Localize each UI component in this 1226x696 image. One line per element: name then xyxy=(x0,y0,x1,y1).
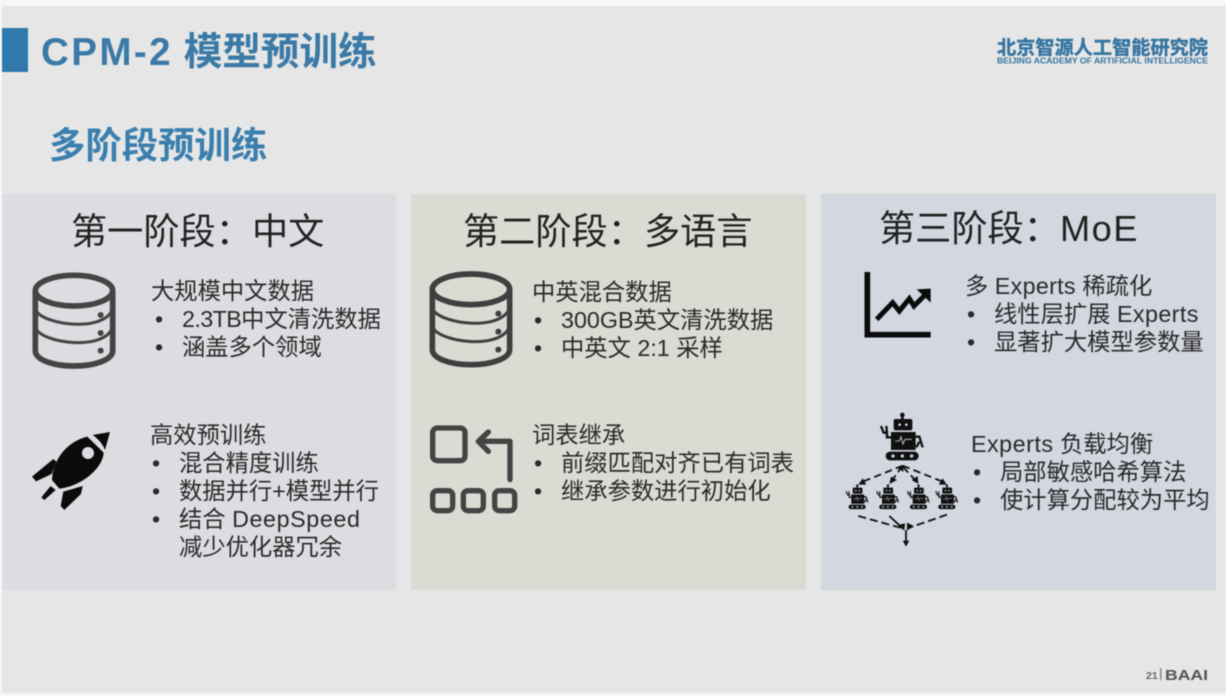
panel heading: stage two: 第二阶段：多语言 xyxy=(463,203,752,255)
icon: database xyxy=(428,270,514,368)
icon: database xyxy=(32,272,116,370)
text block: efficient pre-training: 结合 DeepSpeed xyxy=(179,506,361,532)
logo: Beijing Academy of Artificial Intelligence: BEIJING ACADEMY OF ARTIFICIAL INTELLIGENCE xyxy=(997,56,1209,66)
text block: large-scale Chinese data: 2.3TB中文清洗数据 xyxy=(182,306,381,332)
text block: large-scale Chinese data: 涵盖多个领域 xyxy=(182,334,322,360)
text block: efficient pre-training: 高效预训练 xyxy=(150,422,266,448)
text block: vocabulary inheritance: 词表继承 xyxy=(532,422,625,448)
text block: efficient pre-training: 混合精度训练 xyxy=(179,450,319,476)
panel: stage one, Chinese xyxy=(2,194,396,590)
panel heading: stage one: 第一阶段：中文 xyxy=(71,203,324,255)
icon: rising line chart xyxy=(864,271,932,338)
text block: multiple experts sparsification: 线性层扩展 Experts xyxy=(994,301,1199,327)
text block: experts load balancing: 使计算分配较为平均 xyxy=(1000,487,1210,513)
text block: experts load balancing: Experts 负载均衡 xyxy=(971,431,1153,457)
text block: mixed Chinese-English data xyxy=(532,279,773,361)
text block: mixed Chinese-English data: 中英混合数据 xyxy=(532,279,672,305)
panel heading: stage three: 第三阶段：MoE xyxy=(879,200,1139,252)
text block: efficient pre-training: 减少优化器冗余 xyxy=(179,534,342,560)
icon: rocket xyxy=(32,431,110,510)
text block: mixed Chinese-English data: 中英文 2:1 采样 xyxy=(561,335,723,361)
title: CPM-2 模型预训练 xyxy=(41,31,377,74)
text block: experts load balancing: 局部敏感哈希算法 xyxy=(1000,459,1186,485)
text block: multiple experts sparsification: 多 Experts 稀疏化 xyxy=(965,273,1152,299)
footer: page number and BAAI mark: BAAI xyxy=(1165,667,1208,684)
text block: efficient pre-training xyxy=(150,422,379,560)
text block: multiple experts sparsification xyxy=(965,273,1204,355)
text block: vocabulary inheritance: 继承参数进行初始化 xyxy=(561,478,771,504)
text block: multiple experts sparsification: 显著扩大模型参数量 xyxy=(994,329,1204,355)
subtitle: 多阶段预训练 xyxy=(49,125,267,166)
panel: stage three, MoE xyxy=(821,194,1216,590)
panel: stage two, multilingual xyxy=(411,194,806,590)
title accent bar xyxy=(2,28,28,72)
icon: robots with load balancing xyxy=(845,412,959,547)
text block: large-scale Chinese data xyxy=(151,278,381,360)
text block: efficient pre-training: 数据并行+模型并行 xyxy=(179,478,379,504)
text block: vocabulary inheritance: 前缀匹配对齐已有词表 xyxy=(561,450,794,476)
text block: experts load balancing xyxy=(971,431,1210,513)
text block: vocabulary inheritance xyxy=(532,422,794,504)
footer: page number and BAAI mark xyxy=(1146,667,1208,684)
text block: large-scale Chinese data: 大规模中文数据 xyxy=(151,278,314,304)
footer: page number and BAAI mark: 21 xyxy=(1146,670,1158,682)
text block: mixed Chinese-English data: 300GB英文清洗数据 xyxy=(561,307,773,333)
logo: Beijing Academy of Artificial Intelligence: 北京智源人工智能研究院 xyxy=(997,36,1208,59)
icon: vocabulary inheritance xyxy=(429,424,518,514)
